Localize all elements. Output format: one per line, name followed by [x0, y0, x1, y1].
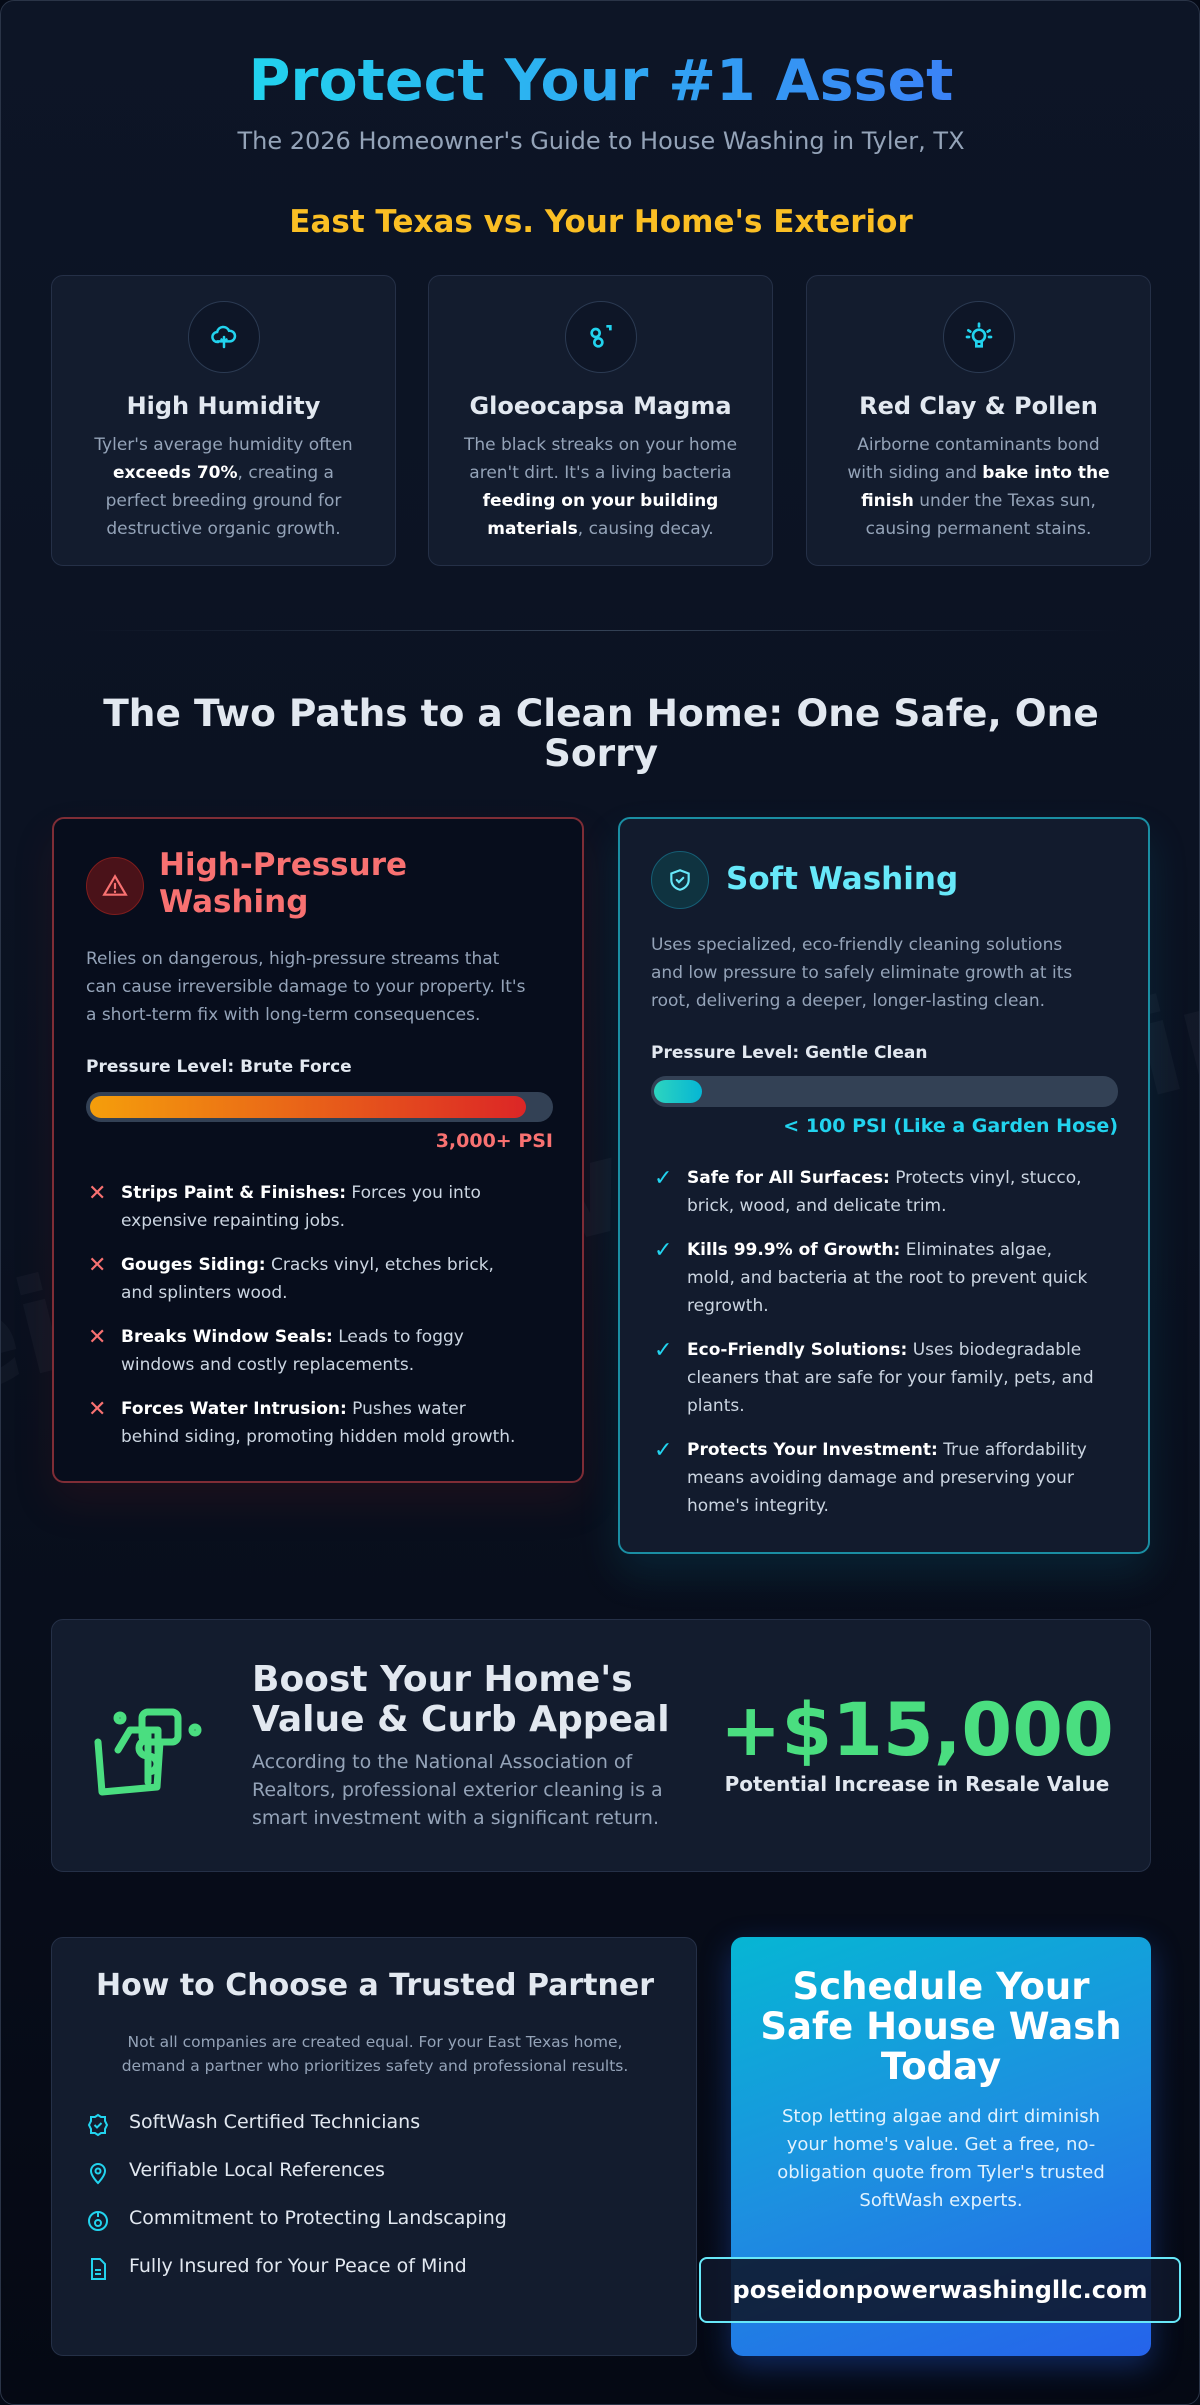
- cta title: Today: [881, 2045, 1001, 2088]
- panel: gloeocapsa: [428, 275, 773, 566]
- description: [651, 935, 1072, 1011]
- list: benefits: mold, and bacteria at the root to prevent quick regrowth.: [687, 1268, 1087, 1316]
- stat caption: Potential Increase in Resale Value: [725, 1772, 1109, 1796]
- panel: trusted partner: [51, 1937, 697, 2356]
- title: Protect Your #1 Asset: [249, 48, 953, 114]
- icon: cloud: [188, 301, 260, 373]
- stat: +$15,000: [720, 1688, 1114, 1773]
- description: Uses specialized, eco-friendly cleaning solutions: [651, 935, 1062, 955]
- psi value: < 100 PSI (Like a Garden Hose): [783, 1115, 1118, 1137]
- pressure label: Pressure Level: Brute Force: [86, 1057, 352, 1077]
- value title: [252, 1659, 670, 1740]
- list: benefits: Eco-Friendly Solutions: Uses biodegradable cleaners that are safe for your family, pets, and plants.: [687, 1340, 1094, 1416]
- list: damages: Gouges Siding: Cracks vinyl, etches brick, and splinters wood.: [121, 1255, 494, 1303]
- pressure bar: [86, 1092, 553, 1122]
- list: benefits: ✓: [654, 1338, 672, 1363]
- partner text: Not all companies are created equal. For your East Texas home, demand a partner who prioritizes safety and professional results.: [122, 2033, 628, 2075]
- panel: red clay: [806, 275, 1151, 566]
- list: damages: ✕: [88, 1397, 106, 1422]
- list: damages: behind siding, promoting hidden mold growth.: [121, 1427, 515, 1447]
- panel: value boost: [51, 1619, 1151, 1872]
- icon: bulb: [943, 301, 1015, 373]
- card title: High Humidity: [127, 392, 320, 420]
- panel: high humidity: [51, 275, 396, 566]
- panel: soft washing: [618, 817, 1150, 1554]
- checklist: Verifiable Local References: [129, 2159, 385, 2181]
- panel: high-pressure washing: [52, 817, 584, 1483]
- cta title: [760, 1965, 1122, 2088]
- panel: call to action: [731, 1937, 1151, 2356]
- card text: The black streaks on your home aren't dirt. It's a living bacteria feeding on your building materials, causing decay.: [464, 435, 737, 539]
- list: damages: [88, 1181, 515, 1447]
- value title: Boost Your Home's: [252, 1659, 633, 1700]
- panel title: Washing: [159, 884, 308, 920]
- icon: shield: [651, 851, 709, 909]
- cta text: Stop letting algae and dirt diminish your home's value. Get a free, no-obligation quote from Tyler's trusted SoftWash experts.: [777, 2106, 1105, 2211]
- card title: Red Clay & Pollen: [859, 392, 1098, 420]
- description: can cause irreversible damage to your property. It's: [86, 977, 525, 997]
- cta title: Schedule Your: [793, 1965, 1089, 2008]
- panel title: Soft Washing: [726, 861, 958, 897]
- card text: Airborne contaminants bond with siding and bake into the finish under the Texas sun, causing permanent stains.: [847, 435, 1110, 539]
- list: damages: Breaks Window Seals: Leads to foggy windows and costly replacements.: [121, 1327, 464, 1375]
- list: benefits: Safe for All Surfaces: Protects vinyl, stucco, brick, wood, and delicate trim.: [687, 1168, 1082, 1216]
- list: damages: Forces Water Intrusion: Pushes water: [121, 1399, 466, 1419]
- url button: poseidonpowerwashingllc.com: [733, 2276, 1147, 2304]
- value title: Value & Curb Appeal: [252, 1699, 670, 1740]
- description: and low pressure to safely eliminate growth at its: [651, 963, 1072, 983]
- checklist: SoftWash Certified Technicians: [129, 2111, 420, 2133]
- heading: two paths: The Two Paths to a Clean Home: One Safe, One Sorry: [103, 691, 1099, 775]
- list: benefits: ✓: [654, 1238, 672, 1263]
- panel title: High-Pressure: [159, 847, 407, 883]
- psi value: 3,000+ PSI: [436, 1130, 553, 1152]
- pressure bar: [651, 1076, 1118, 1107]
- card text: Tyler's average humidity often exceeds 70%, creating a perfect breeding ground for destructive organic growth.: [94, 435, 353, 539]
- list: benefits: Protects Your Investment: True affordability means avoiding damage and preserving your home's integrity.: [687, 1440, 1087, 1516]
- icon: warning: [86, 857, 144, 915]
- heading: east texas: East Texas vs. Your Home's Exterior: [289, 204, 913, 240]
- checklist: Fully Insured for Your Peace of Mind: [129, 2255, 467, 2277]
- list: damages: ✕: [88, 1325, 106, 1350]
- card title: Gloeocapsa Magma: [469, 392, 732, 420]
- checklist: [88, 2111, 507, 2280]
- list: benefits: [654, 1166, 1094, 1516]
- panel title: [159, 847, 407, 920]
- list: damages: Strips Paint & Finishes: Forces you into expensive repainting jobs.: [121, 1183, 481, 1231]
- list: benefits: ✓: [654, 1166, 672, 1191]
- list: damages: ✕: [88, 1181, 106, 1206]
- checklist: Commitment to Protecting Landscaping: [129, 2207, 507, 2229]
- cta title: Safe House Wash: [760, 2005, 1122, 2048]
- description: a short-term fix with long-term consequences.: [86, 1005, 480, 1025]
- partner title: How to Choose a Trusted Partner: [96, 1968, 654, 2003]
- list: damages: ✕: [88, 1253, 106, 1278]
- pressure label: Pressure Level: Gentle Clean: [651, 1043, 927, 1063]
- icon: bacteria: [565, 301, 637, 373]
- list: benefits: ✓: [654, 1438, 672, 1463]
- description: [86, 949, 525, 1025]
- description: Relies on dangerous, high-pressure streams that: [86, 949, 499, 969]
- description: root, delivering a deeper, longer-lasting clean.: [651, 991, 1045, 1011]
- icon: money: [94, 1708, 202, 1796]
- url button: [699, 2257, 1181, 2323]
- list: benefits: Kills 99.9% of Growth: Eliminates algae,: [687, 1240, 1052, 1260]
- subtitle: The 2026 Homeowner's Guide to House Washing in Tyler, TX: [237, 127, 965, 155]
- value text: According to the National Association of Realtors, professional exterior cleaning is a smart investment with a significant return.: [252, 1751, 663, 1829]
